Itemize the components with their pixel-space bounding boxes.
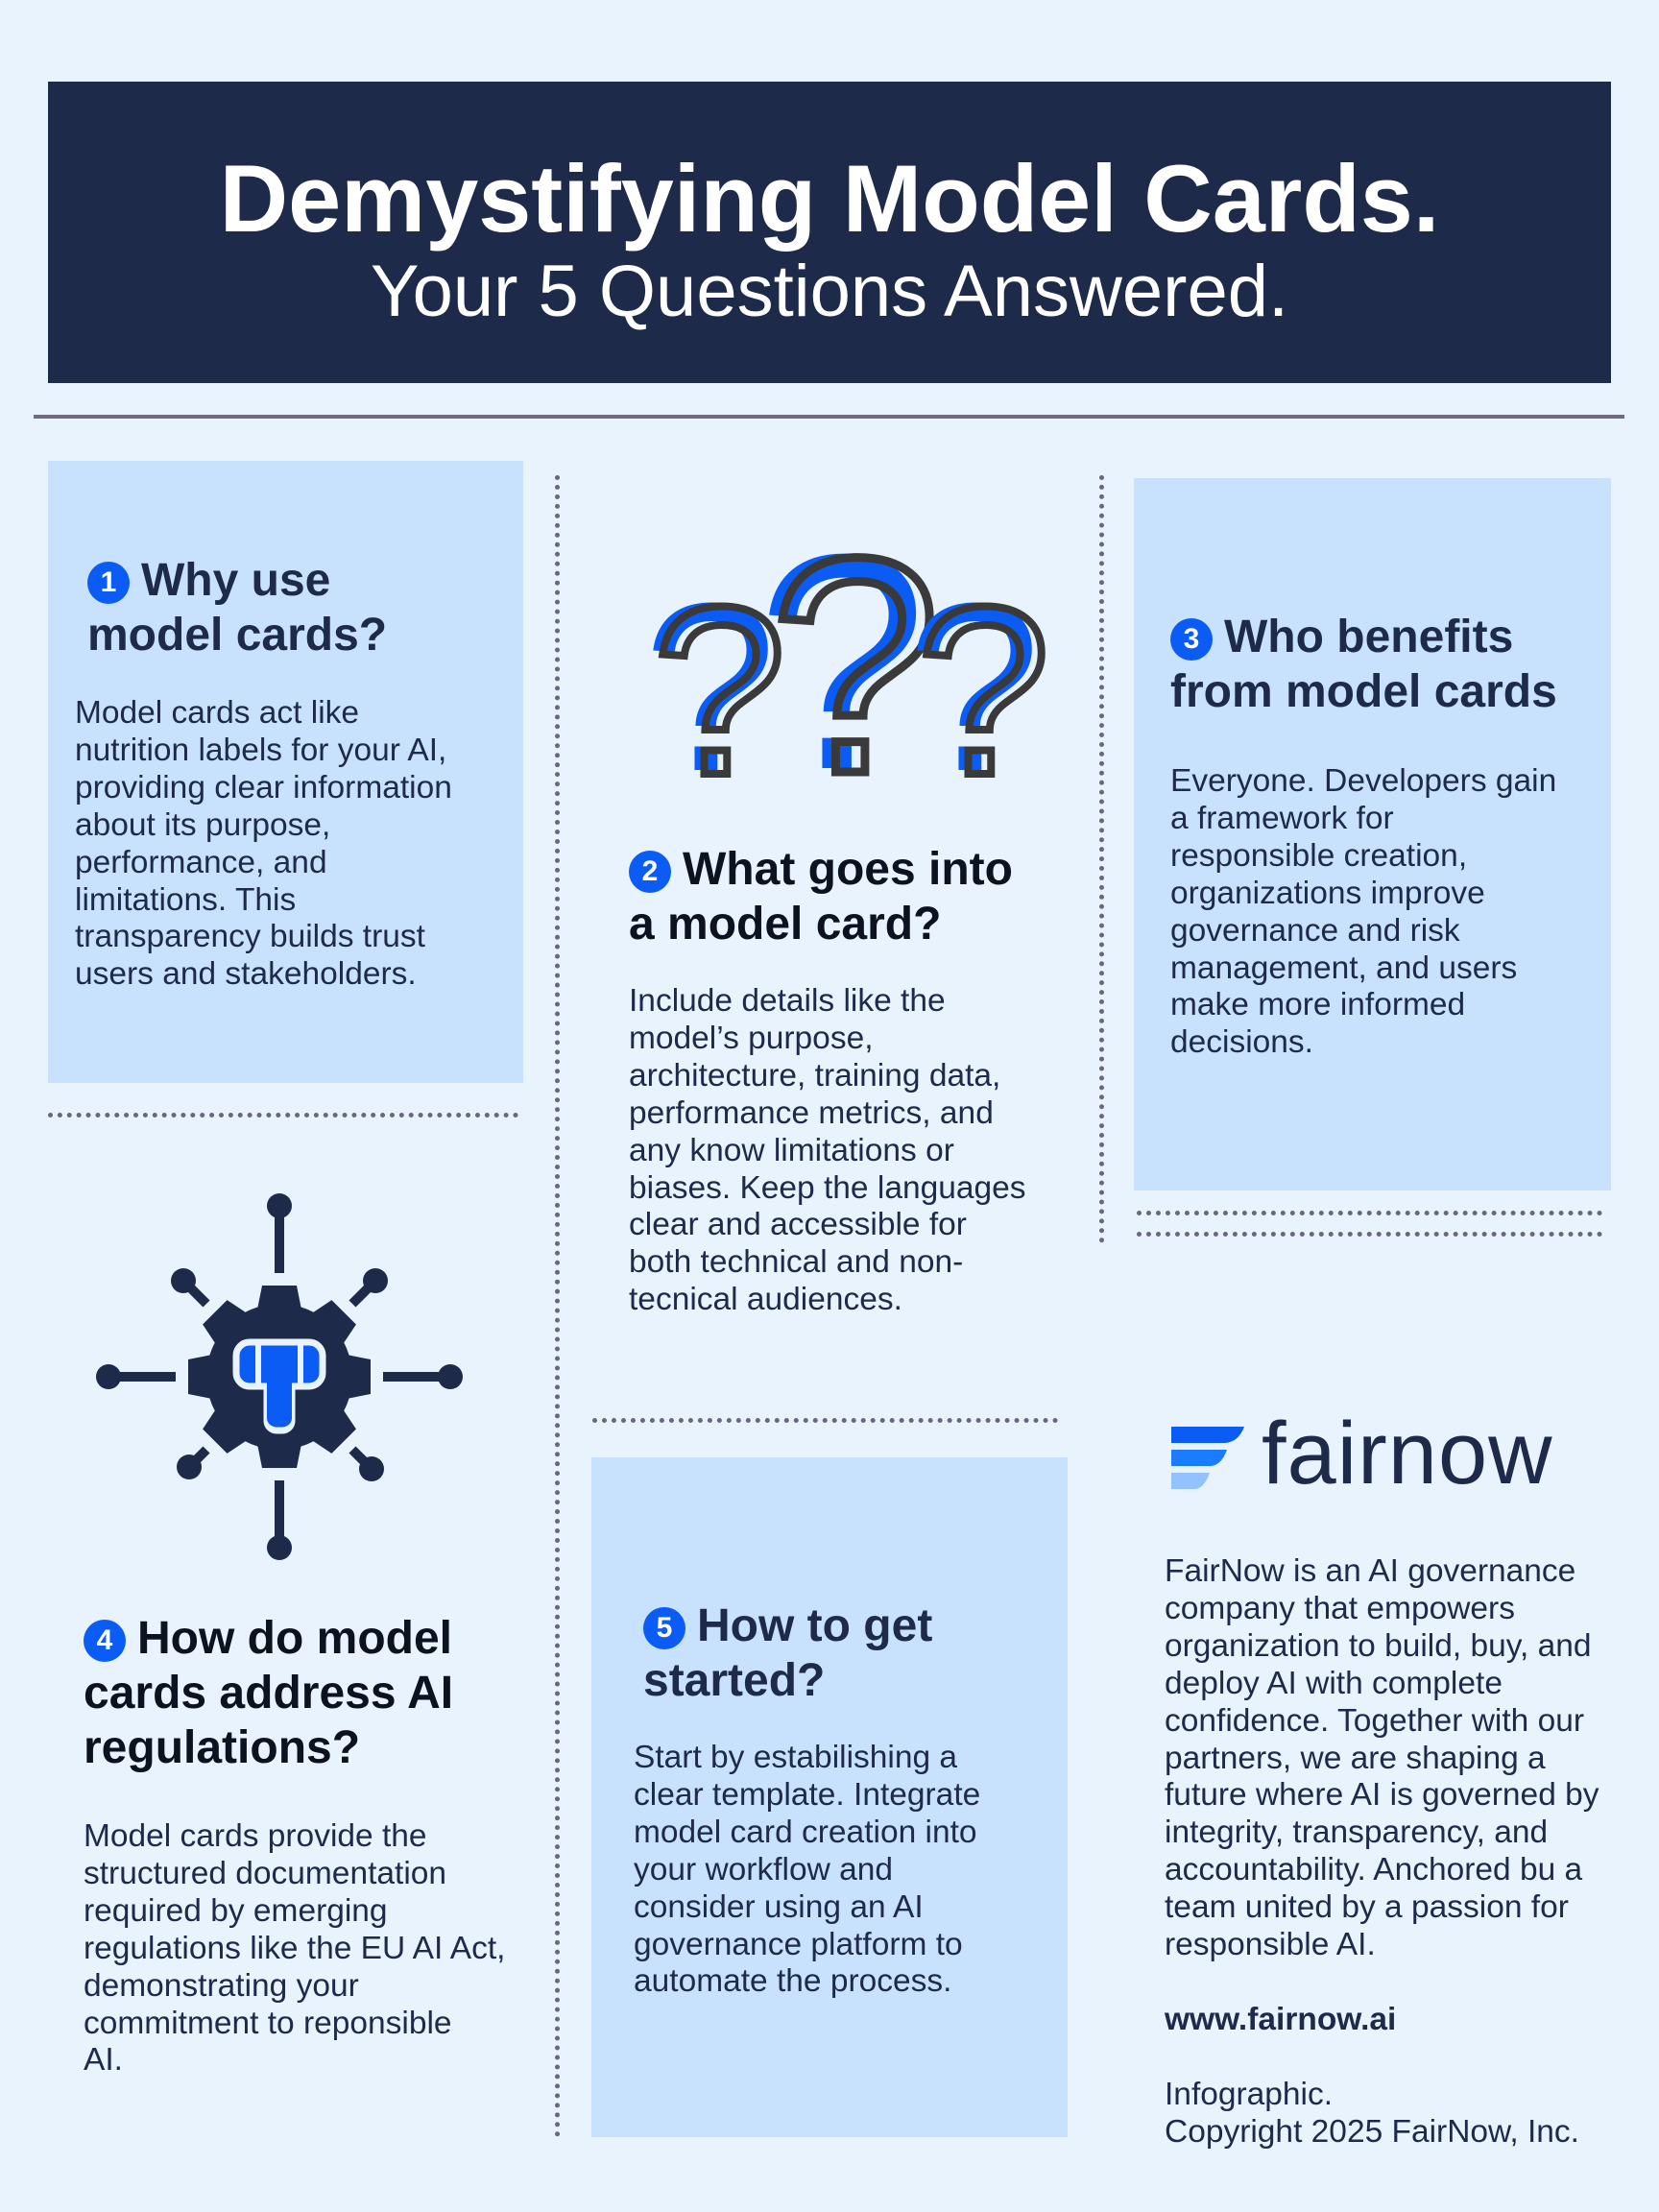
heading 1: Why use (141, 555, 330, 606)
text 1: transparency builds trust (75, 919, 425, 954)
heading 4: 4 (97, 1624, 112, 1656)
text 4: AI. (84, 2042, 123, 2078)
text 3: Everyone. Developers gain (1170, 763, 1556, 799)
about text: www.fairnow.ai (1165, 2002, 1396, 2037)
text 5: Start by estabilishing a (634, 1740, 957, 1775)
icon: question marks (643, 538, 1050, 797)
text 4: Model cards provide the (84, 1818, 427, 1854)
text 2: model’s purpose, (629, 1021, 874, 1056)
text 3: a framework for (1170, 801, 1394, 836)
text 4: structured documentation (84, 1856, 446, 1891)
heading 4 (84, 1613, 453, 1773)
heading 3: from model cards (1170, 666, 1557, 717)
text 5 (634, 1740, 980, 1999)
text 1: about its purpose, (75, 807, 330, 843)
heading 2: 2 (642, 855, 658, 887)
text 1: providing clear information (75, 770, 452, 805)
heading 2: a model card? (629, 899, 941, 950)
about text: future where AI is governed by (1165, 1777, 1599, 1813)
text 1 (75, 695, 452, 992)
about text: team united by a passion for (1165, 1889, 1569, 1925)
heading 3: Who benefits (1224, 612, 1513, 662)
text 2: Include details like the (629, 983, 946, 1019)
about text: deploy AI with complete (1165, 1666, 1503, 1701)
about text: accountability. Anchored bu a (1165, 1852, 1582, 1887)
text 2: architecture, training data, (629, 1058, 1000, 1094)
text 2 (629, 983, 1025, 1317)
text 1: Model cards act like (75, 695, 359, 731)
about text: FairNow is an AI governance (1165, 1553, 1575, 1589)
text 3: responsible creation, (1170, 838, 1467, 874)
text 2: tecnical audiences. (629, 1282, 902, 1317)
text 4 (84, 1818, 505, 2078)
text 2: clear and accessible for (629, 1207, 967, 1242)
text 1: users and stakeholders. (75, 956, 417, 992)
title: Demystifying Model Cards. (220, 145, 1439, 252)
heading 1: model cards? (87, 610, 387, 661)
about text: company that empowers (1165, 1591, 1515, 1626)
about text: responsible AI. (1165, 1927, 1376, 1962)
text 1: performance, and (75, 845, 327, 880)
about text: organization to build, buy, and (1165, 1628, 1592, 1664)
text 5: your workflow and (634, 1852, 893, 1887)
heading 4: How do model (137, 1613, 452, 1664)
heading 1: 1 (101, 566, 116, 598)
about text: confidence. Together with our (1165, 1703, 1584, 1739)
about text (1164, 1553, 1599, 2150)
heading 1 (87, 555, 387, 661)
panel 1: why use model cards (48, 461, 523, 1083)
about text: partners, we are shaping a (1165, 1741, 1546, 1776)
text 2: biases. Keep the languages (629, 1170, 1025, 1206)
text 5: model card creation into (634, 1815, 977, 1850)
about text: Copyright 2025 FairNow, Inc. (1165, 2114, 1579, 2150)
heading 2 (629, 844, 1013, 950)
text 3: management, and users (1170, 950, 1517, 986)
heading 3: 3 (1184, 623, 1199, 655)
text 1: nutrition labels for your AI, (75, 733, 446, 768)
text 5: automate the process. (634, 1963, 951, 1999)
text 2: performance metrics, and (629, 1095, 994, 1131)
about text: Infographic. (1165, 2077, 1333, 2112)
text 4: demonstrating your (84, 1968, 359, 2004)
text 3 (1170, 763, 1556, 1060)
text 5: governance platform to (634, 1927, 963, 1962)
text 1: limitations. This (75, 882, 296, 918)
heading 5 (643, 1600, 932, 1706)
text 4: regulations like the EU AI Act, (84, 1931, 505, 1966)
text 2: both technical and non- (629, 1244, 963, 1280)
logo: fairnow: fairnow (1262, 1405, 1553, 1503)
about text: integrity, transparency, and (1165, 1815, 1548, 1850)
text 5: consider using an AI (634, 1889, 924, 1925)
heading 4: cards address AI (84, 1668, 453, 1719)
heading 3 (1170, 612, 1557, 717)
heading 5: How to get (697, 1600, 932, 1651)
panel 5: how to get started (591, 1457, 1068, 2137)
header banner (48, 82, 1611, 383)
heading 4: regulations? (84, 1722, 360, 1773)
text 3: governance and risk (1170, 913, 1460, 949)
subtitle: Your 5 Questions Answered. (371, 251, 1288, 332)
heading 2: What goes into (683, 844, 1013, 895)
text 3: make more informed (1170, 987, 1465, 1022)
text 2: any know limitations or (629, 1133, 954, 1168)
text 5: clear template. Integrate (634, 1777, 980, 1813)
text 3: decisions. (1170, 1024, 1313, 1060)
heading 5: started? (643, 1655, 825, 1706)
panel 3: who benefits (1134, 478, 1611, 1190)
text 4: required by emerging (84, 1893, 388, 1929)
heading 5: 5 (657, 1612, 672, 1644)
icon: gear with gavel (96, 1193, 463, 1560)
text 4: commitment to reponsible (84, 2006, 452, 2041)
text 3: organizations improve (1170, 876, 1485, 911)
